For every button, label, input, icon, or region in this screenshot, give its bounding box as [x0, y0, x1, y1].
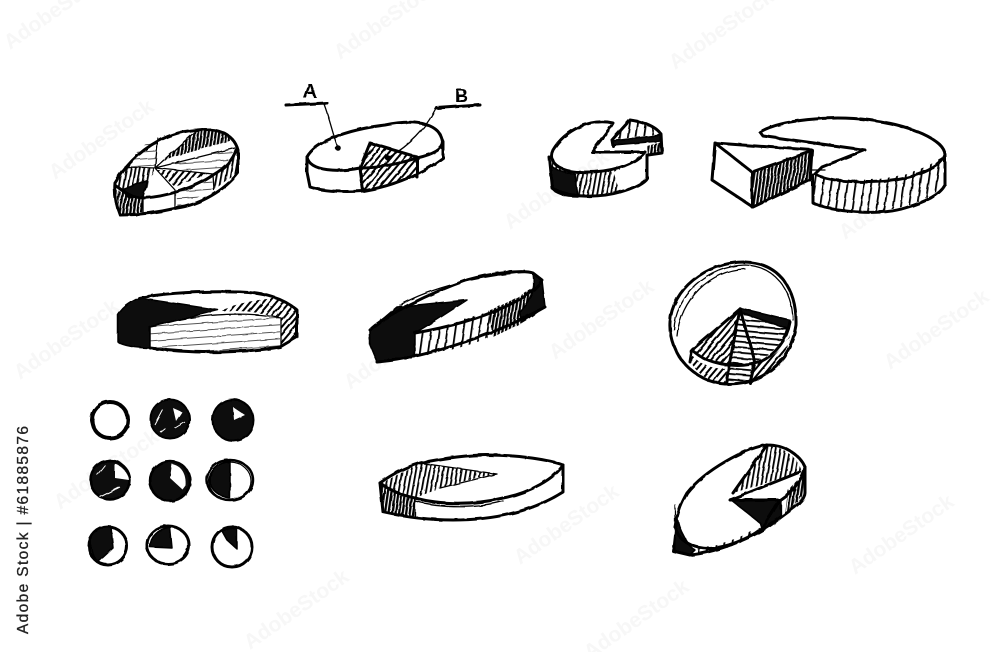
icon: pie with large wedge [150, 461, 190, 501]
stock credit text: Adobe Stock | #61885876 [15, 426, 32, 634]
icon: empty ring [92, 402, 128, 438]
chart: pie with labels A and B [286, 81, 480, 192]
icon: pie left half filled [89, 527, 127, 565]
watermark pattern: AdobeStock [240, 565, 353, 652]
chart: pie with small detached slice [549, 120, 662, 197]
watermark pattern: AdobeStock [845, 490, 958, 579]
watermark pattern: AdobeStock [340, 305, 453, 394]
icon: pie small slice [212, 527, 252, 567]
watermark pattern: AdobeStock [545, 275, 658, 364]
icon: pie with quarter wedge [90, 460, 130, 500]
label B [385, 86, 480, 161]
watermark pattern: AdobeStock [45, 95, 158, 184]
icon grid: small pie icons [89, 400, 254, 567]
label A: A [303, 81, 317, 103]
icon: pie top left quarter [147, 526, 189, 564]
chart: round pie seen from above [670, 262, 796, 384]
watermark pattern: AdobeStock [835, 155, 948, 244]
chart: flat pie with dark and light sections [118, 292, 297, 353]
icon: half pie [207, 460, 253, 500]
chart: pie with hatched wedge at left [380, 455, 563, 520]
chart: segmented pie [115, 129, 238, 215]
icon: pie with top wedge [212, 400, 254, 440]
watermark pattern: AdobeStock [510, 480, 623, 569]
label B: B [455, 86, 468, 106]
chart: tilted pie with dark wedge [370, 272, 545, 363]
icon: pie mostly filled [150, 400, 190, 438]
chart: large pie with detached slice [712, 118, 945, 212]
chart: tilted oval pie with wedges [673, 445, 805, 555]
watermark pattern: AdobeStock [10, 295, 123, 384]
watermark pattern: AdobeStock [50, 425, 163, 514]
watermark pattern: AdobeStock [500, 145, 613, 234]
watermark pattern: AdobeStock [880, 285, 993, 374]
label A [286, 81, 341, 151]
